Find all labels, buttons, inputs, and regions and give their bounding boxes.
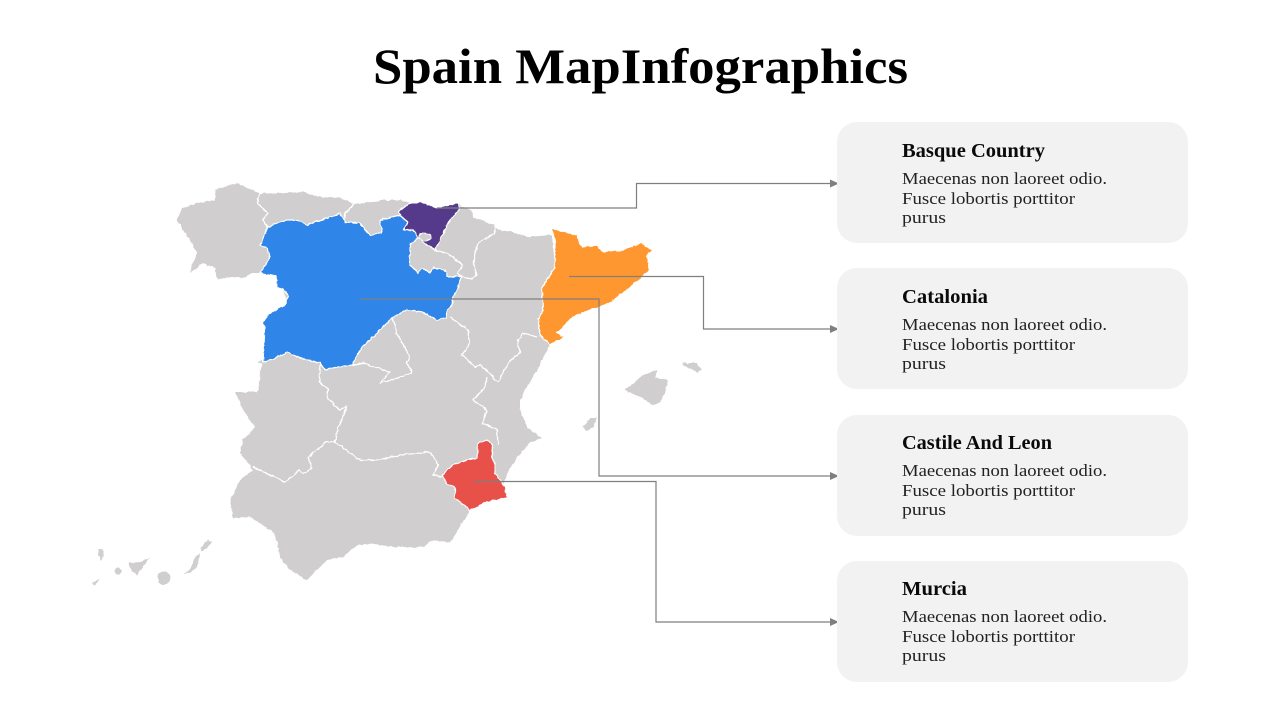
panel: Murcia bbox=[837, 561, 1188, 682]
body text: Fusce lobortis porttitor bbox=[902, 189, 1075, 208]
panel: Castile And Leon bbox=[837, 415, 1188, 536]
body text: Maecenas non laoreet odio. bbox=[902, 315, 1107, 334]
region: Catalonia bbox=[538, 228, 652, 345]
body text bbox=[902, 461, 1107, 519]
heading: Catalonia bbox=[902, 286, 988, 308]
connector: Catalonia bbox=[569, 276, 838, 329]
body text bbox=[902, 607, 1107, 665]
body text: Fusce lobortis porttitor bbox=[902, 335, 1075, 354]
region borders bbox=[253, 193, 537, 482]
heading: Murcia bbox=[902, 578, 967, 600]
panel: Basque Country bbox=[837, 122, 1188, 243]
heading: Basque Country bbox=[902, 140, 1045, 162]
body text: Fusce lobortis porttitor bbox=[902, 627, 1075, 646]
Balearic Islands bbox=[583, 363, 702, 431]
body text: Maecenas non laoreet odio. bbox=[902, 169, 1107, 188]
title: Spain MapInfographics bbox=[373, 38, 908, 94]
body text: Maecenas non laoreet odio. bbox=[902, 461, 1107, 480]
body text: Maecenas non laoreet odio. bbox=[902, 607, 1107, 626]
connector: Basque Country bbox=[437, 184, 838, 208]
body text bbox=[902, 169, 1107, 227]
body text: Fusce lobortis porttitor bbox=[902, 481, 1075, 500]
region: Murcia bbox=[442, 440, 507, 510]
mainland silhouette bbox=[177, 183, 565, 580]
body text: purus bbox=[902, 208, 946, 227]
region: Basque Country bbox=[398, 202, 460, 250]
connector: Murcia bbox=[474, 482, 838, 622]
region: Castile and Leon bbox=[260, 213, 462, 370]
heading: Castile And Leon bbox=[902, 432, 1052, 454]
enclave bbox=[419, 233, 431, 241]
body text: purus bbox=[902, 646, 946, 665]
connector: Castile and Leon bbox=[360, 299, 838, 476]
body text: purus bbox=[902, 354, 946, 373]
Canary Islands bbox=[92, 540, 212, 585]
body text bbox=[902, 315, 1107, 373]
map: Spain bbox=[92, 183, 702, 585]
panel: Catalonia bbox=[837, 268, 1188, 389]
body text: purus bbox=[902, 500, 946, 519]
